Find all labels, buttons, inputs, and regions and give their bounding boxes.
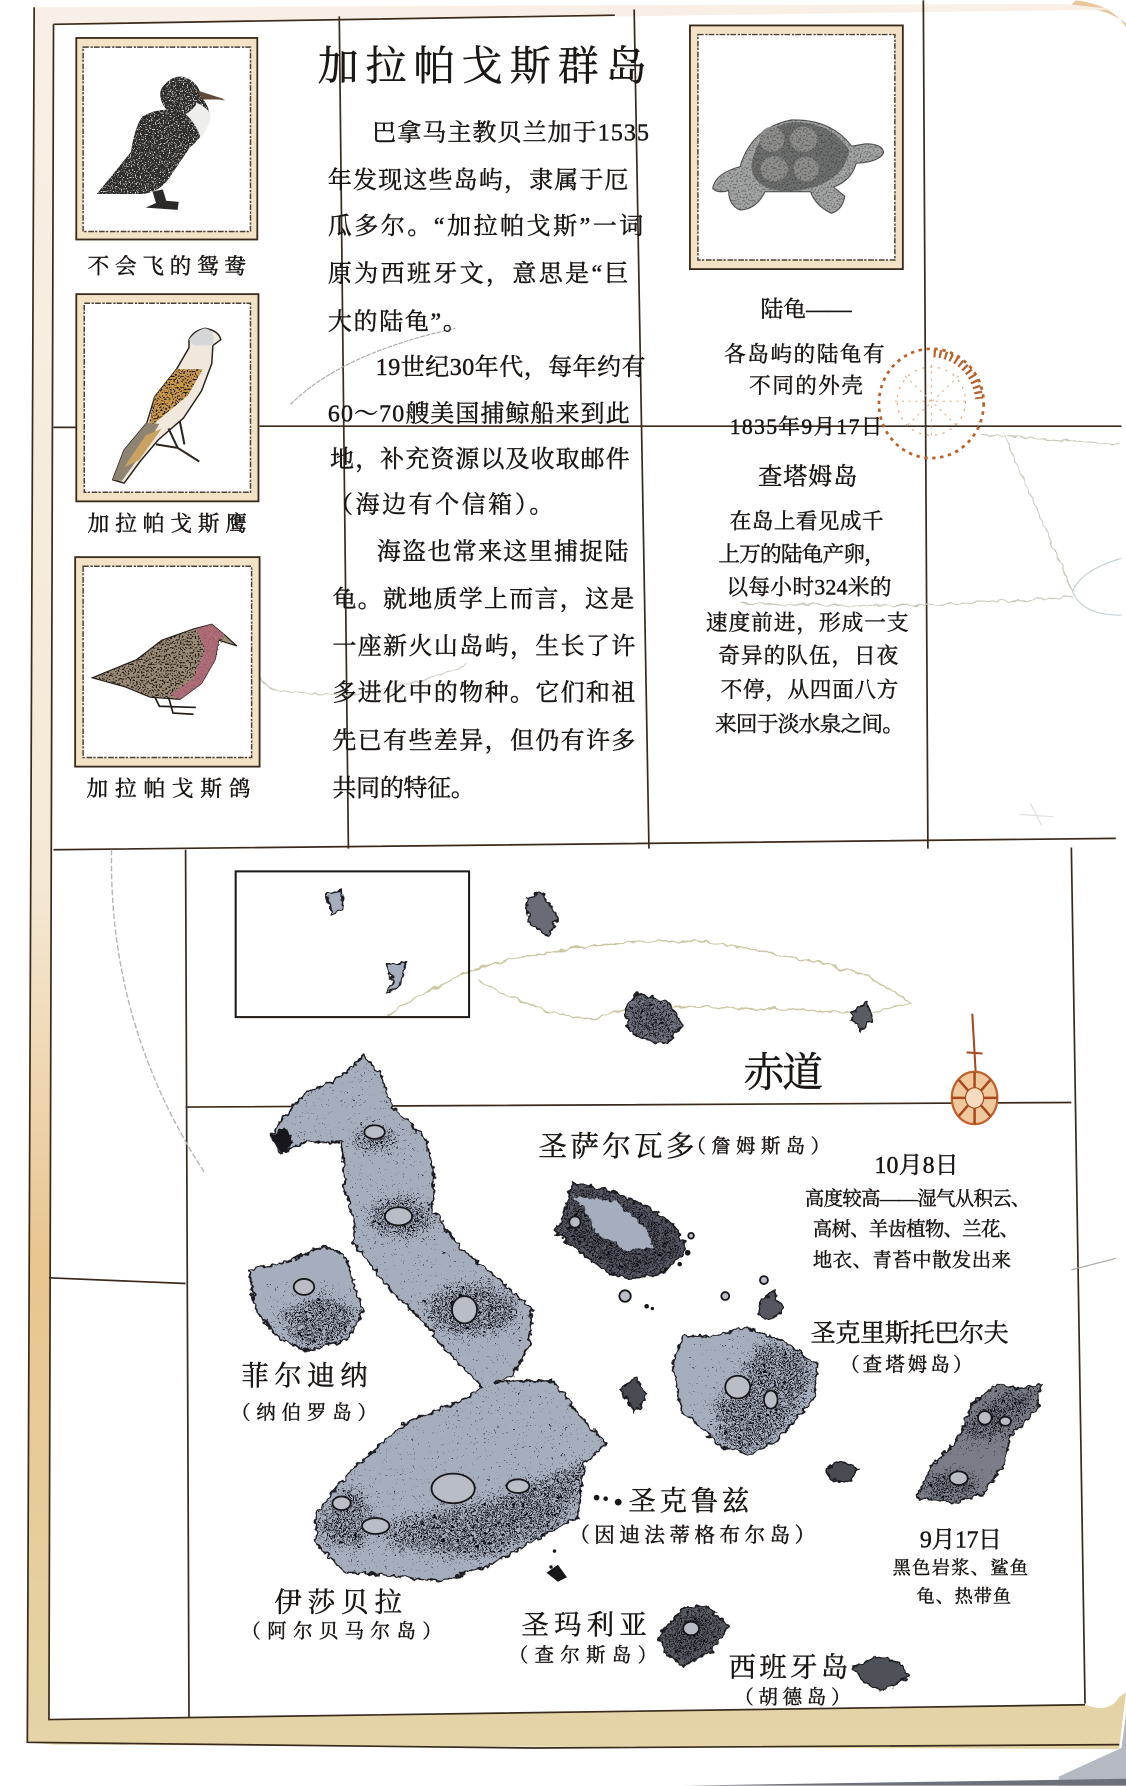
craters xyxy=(332,1125,529,1534)
Chatham note: 在岛上看见成千 xyxy=(730,510,883,534)
island: Santiago xyxy=(554,1183,694,1310)
label: San Salvador: （詹姆斯岛） xyxy=(687,1136,830,1158)
Chatham note: 来回于淡水泉之间。 xyxy=(715,712,904,736)
date and place xyxy=(730,415,882,490)
island: Wolf xyxy=(327,891,343,915)
main text block: 先已有些差异，但仍有许多 xyxy=(332,727,635,754)
picture: Galapagos hawk xyxy=(76,294,258,501)
island: Darwin xyxy=(387,962,406,993)
note: October 8: 高度较高——湿气从积云、 xyxy=(805,1188,1030,1210)
label: San Cristobal xyxy=(811,1320,1009,1376)
Chatham note: 速度前进，形成一支 xyxy=(706,611,909,636)
island: Pinzon xyxy=(620,1378,647,1412)
main text block: 龟。就地质学上而言，这是 xyxy=(332,586,634,613)
inset map box xyxy=(236,871,469,1017)
equator label: 赤道 xyxy=(743,1050,823,1096)
label: Espanola xyxy=(729,1652,850,1709)
label: Fernandina xyxy=(231,1361,377,1424)
small rocks near Santa Maria xyxy=(546,1549,567,1582)
label: San Salvador xyxy=(539,1131,830,1163)
note: October 8: 高树、羊齿植物、兰花、 xyxy=(813,1219,1019,1241)
island: Isabela xyxy=(271,1056,606,1581)
note: September 17: 龟、热带鱼 xyxy=(917,1586,1011,1606)
picture: flightless cormorant xyxy=(76,38,257,239)
tortoise note: 不同的外壳 xyxy=(749,374,863,398)
Chatham note: 奇异的队伍，日夜 xyxy=(718,644,899,669)
island: Marchena xyxy=(849,1002,872,1031)
main text block xyxy=(328,119,649,802)
picture: giant tortoise xyxy=(690,25,903,269)
island: Genovesa xyxy=(625,993,683,1043)
main text block: 60～70艘美国捕鲸船来到此 xyxy=(328,401,630,428)
date and place: 查塔姆岛 xyxy=(758,463,857,490)
date and place: 1835年9月17日 xyxy=(730,415,882,439)
main text block: 地，补充资源以及收取邮件 xyxy=(330,446,630,473)
main text block: 巴拿马主教贝兰加于1535 xyxy=(372,119,649,146)
small islets xyxy=(721,1276,782,1321)
compass stamp: large xyxy=(879,349,984,458)
caption: tortoise: 陆龟—— xyxy=(761,297,852,322)
label: Santa Cruz: （因迪法蒂格布尔岛） xyxy=(569,1524,815,1547)
note: September 17: 9月17日 xyxy=(920,1528,1002,1554)
label: Fernandina: （纳伯罗岛） xyxy=(231,1402,377,1424)
Chatham note: 不停，从四面八方 xyxy=(721,678,898,703)
tortoise note xyxy=(724,342,885,398)
label: San Salvador: 圣萨尔瓦多 xyxy=(539,1131,694,1163)
note: September 17 xyxy=(893,1528,1028,1606)
label: Santa Maria: 圣玛利亚 xyxy=(521,1610,647,1640)
caption: Galapagos dove: 加拉帕戈斯鸽 xyxy=(87,777,250,801)
caption: Galapagos hawk: 加拉帕戈斯鹰 xyxy=(88,512,247,536)
island: Fernandina xyxy=(249,1246,363,1351)
note: September 17: 黑色岩浆、鲨鱼 xyxy=(893,1558,1028,1578)
main text block: 19世纪30年代，每年约有 xyxy=(376,354,646,381)
label: Isabela xyxy=(241,1587,442,1643)
label: Santa Maria: （查尔斯岛） xyxy=(509,1645,657,1667)
label: Santa Cruz: 圣克鲁兹 xyxy=(628,1486,750,1516)
tortoise note: 各岛屿的陆龟有 xyxy=(724,342,885,366)
label: San Cristobal: 圣克里斯托巴尔夫 xyxy=(811,1320,1009,1348)
main text block: 多进化中的物种。它们和祖 xyxy=(332,680,635,707)
label: Espanola: 西班牙岛 xyxy=(729,1652,848,1682)
paper creases and tears xyxy=(111,328,1121,1173)
main text block: 瓜多尔。“加拉帕戈斯”一词 xyxy=(328,213,643,240)
main text block: 海盗也常来这里捕捉陆 xyxy=(377,538,629,565)
label: Espanola: （胡德岛） xyxy=(734,1687,850,1709)
island: Espanola xyxy=(852,1657,909,1691)
label: Santa Cruz xyxy=(569,1486,815,1547)
island: Pinta xyxy=(526,891,558,936)
main text block: 年发现这些岛屿，隶属于厄 xyxy=(328,167,628,194)
note: October 8: 10月8日 xyxy=(874,1153,959,1179)
island: San Cristobal xyxy=(917,1384,1042,1503)
label: San Cristobal: （查塔姆岛） xyxy=(840,1354,972,1376)
main text block: 大的陆龟”。 xyxy=(328,308,467,335)
Chatham note: 上万的陆龟产卵， xyxy=(718,543,886,568)
main text block: 共同的特征。 xyxy=(332,775,475,802)
label: Isabela: （阿尔贝马尔岛） xyxy=(241,1621,442,1643)
caption: flightless cormorant: 不会飞的鸳鸯 xyxy=(88,255,246,279)
note: October 8 xyxy=(805,1153,1030,1271)
label: Fernandina: 菲尔迪纳 xyxy=(241,1361,368,1391)
note: October 8: 地衣、青苔中散发出来 xyxy=(813,1249,1011,1271)
label: Isabela: 伊莎贝拉 xyxy=(274,1587,402,1617)
island: Floreana xyxy=(658,1606,729,1666)
main text block: 原为西班牙文，意思是“巨 xyxy=(328,261,628,288)
picture: Galapagos dove xyxy=(75,557,260,767)
label: Santa Maria xyxy=(509,1610,657,1667)
title: 加拉帕戈斯群岛 xyxy=(318,43,647,89)
Chatham note: 以每小时324米的 xyxy=(726,576,891,600)
main text block: 一座新火山岛屿，生长了许 xyxy=(332,633,635,660)
main text block: （海边有个信箱）。 xyxy=(329,492,553,519)
island: Santa Fe xyxy=(825,1461,860,1483)
island: Santa Cruz xyxy=(672,1327,817,1458)
Chatham note xyxy=(706,510,909,736)
right column text xyxy=(706,297,909,736)
compass stamp: small xyxy=(952,1014,997,1124)
